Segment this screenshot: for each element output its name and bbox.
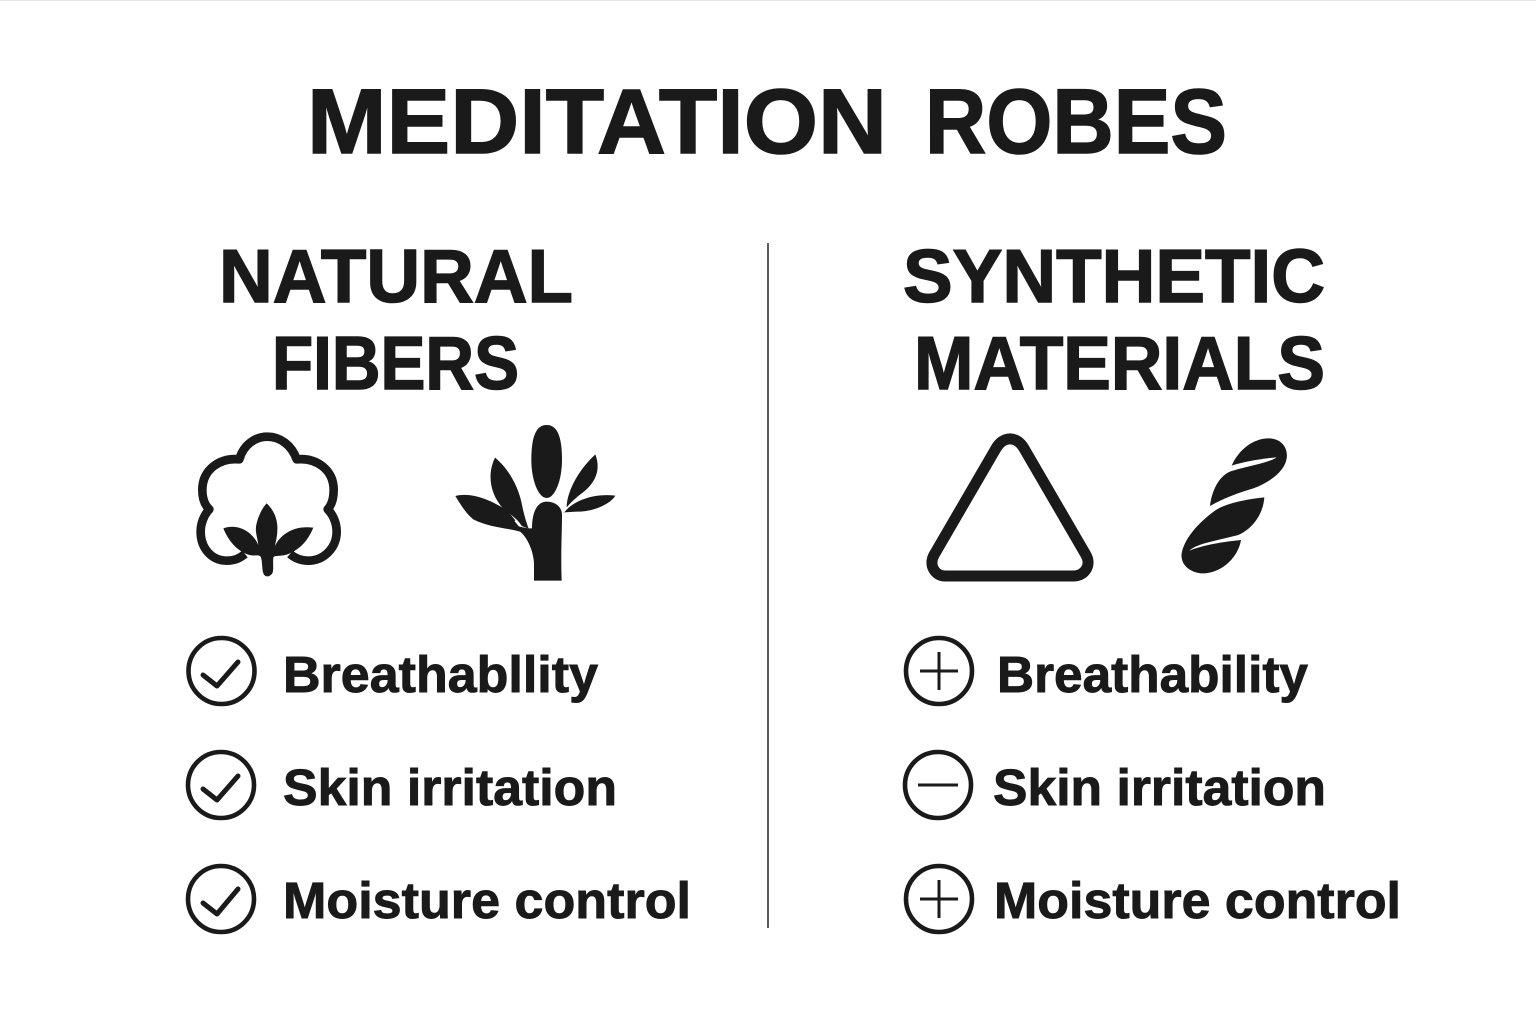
heading: natural fibers: FIBERS <box>272 321 519 405</box>
row: skin irritation minus <box>905 752 1326 818</box>
heading: synthetic materials <box>903 234 1325 405</box>
title <box>307 71 1227 173</box>
panel: synthetic materials <box>903 234 1401 932</box>
icon: twisted fiber <box>1182 438 1287 573</box>
icon: cotton boll <box>201 437 337 576</box>
heading: natural fibers <box>219 234 573 405</box>
row: breathability plus <box>906 638 1309 704</box>
row: moisture control check: Moisture control <box>283 872 691 929</box>
divider between columns <box>767 243 769 928</box>
row: breathability check: Breathabllity <box>283 646 599 703</box>
title: ROBES <box>925 71 1227 173</box>
icon: bamboo plant <box>455 425 615 581</box>
heading: natural fibers: NATURAL <box>219 234 573 318</box>
row: moisture control check <box>188 866 691 932</box>
heading: synthetic materials: MATERIALS <box>914 321 1325 405</box>
row: skin irritation check: Skin irritation <box>283 759 617 816</box>
row: breathability plus: Breathability <box>997 646 1309 703</box>
panel: natural fibers <box>188 234 691 932</box>
row: breathability check <box>188 638 599 704</box>
row: moisture control plus <box>906 866 1401 932</box>
icon: rounded triangle <box>932 439 1088 576</box>
heading: synthetic materials: SYNTHETIC <box>903 234 1325 318</box>
title: MEDITATION <box>307 71 887 173</box>
row: skin irritation check <box>188 752 617 818</box>
row: skin irritation minus: Skin irritation <box>993 759 1326 816</box>
row: moisture control plus: Moisture control <box>994 872 1401 929</box>
